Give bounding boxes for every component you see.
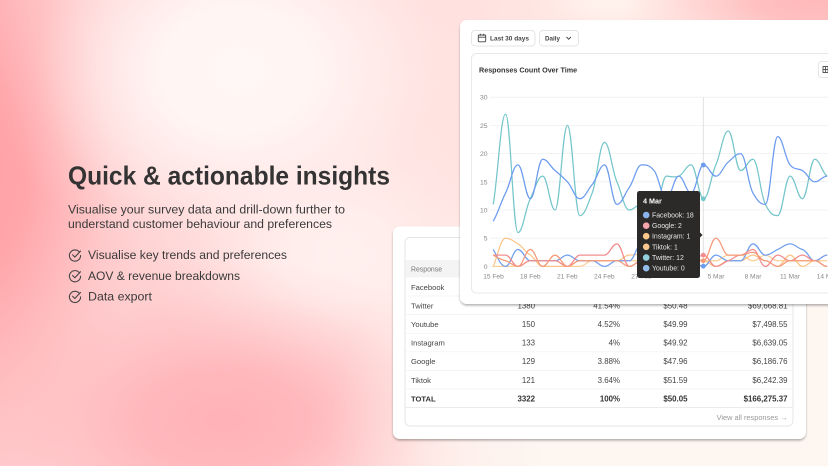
item 2: AOV & revenue breakdowns (88, 269, 240, 283)
x axis labels: 27 Feb (631, 274, 652, 280)
series: google (493, 244, 827, 266)
y axis grid and labels: 10 (480, 208, 488, 214)
series: youtube low (493, 244, 827, 266)
table rows: $50.05 (663, 394, 688, 404)
x axis labels: 18 Feb (520, 274, 541, 280)
table rows: Tiktok (411, 376, 431, 385)
table rows: $49.92 (663, 339, 688, 348)
table rows: Facebook (411, 283, 445, 292)
item 3: Data export (88, 290, 153, 304)
icon: check 3 (69, 291, 81, 303)
chart title: Responses Count Over Time (479, 65, 577, 74)
table rows: 3322 (517, 394, 536, 404)
date range button: Last 30 days (490, 36, 529, 42)
export button (818, 62, 828, 78)
series: facebook (493, 137, 827, 221)
table rows: $51.59 (663, 376, 688, 385)
table rows: 41.54% (593, 301, 620, 310)
table rows: 4.52% (598, 320, 620, 329)
panel: line chart (472, 54, 828, 293)
y axis grid and labels (480, 95, 828, 271)
view all link: View all responses → (717, 413, 788, 422)
x axis labels: 8 Mar (745, 274, 762, 280)
y axis grid and labels: 20 (480, 151, 488, 158)
x axis labels: 24 Feb (594, 274, 615, 280)
table rows: 1380 (517, 301, 536, 310)
tooltip: Instagram: 1 (652, 234, 690, 241)
table header (405, 260, 793, 278)
tooltip: Twitter: 12 (652, 255, 684, 262)
table rows: Youtube (411, 320, 439, 329)
tooltip: 4 Mar (643, 197, 662, 206)
table rows: 3.64% (598, 376, 620, 385)
x axis labels: 21 Feb (557, 274, 578, 280)
tooltip: Youtube: 0 (652, 266, 685, 273)
feature list (69, 248, 287, 304)
table rows: 133 (522, 339, 536, 348)
item 1: Visualise key trends and preferences (88, 248, 287, 262)
table rows: $6,639.05 (752, 339, 788, 348)
table rows: $50.48 (663, 301, 688, 310)
y axis grid and labels: 5 (484, 236, 488, 243)
frequency dropdown: Daily (545, 36, 561, 42)
series: orange (493, 238, 827, 266)
tooltip: Facebook: 18 (652, 212, 694, 220)
table rows: Twitter (411, 301, 434, 310)
frequency dropdown (540, 30, 578, 46)
tooltip: Google: 2 (652, 223, 682, 230)
title: Quick & actionable insights (68, 160, 390, 190)
icon: check 1 (69, 250, 81, 261)
table rows: Google (411, 357, 436, 366)
subtitle text: Visualise your survey data and drill-down further to (68, 202, 345, 216)
table rows: $6,186.76 (752, 357, 788, 366)
table rows: $166,275.37 (744, 394, 788, 404)
x axis labels: 11 Mar (780, 274, 801, 280)
panel: chart card (460, 20, 828, 304)
tooltip (637, 191, 702, 278)
table rows (411, 283, 788, 404)
table rows: TOTAL (411, 394, 436, 404)
tooltip: Tiktok: 1 (652, 244, 678, 251)
table header: Response (411, 266, 442, 274)
table rows: 129 (522, 357, 536, 366)
y axis grid and labels: 15 (480, 179, 488, 186)
x axis labels: 15 Feb (483, 274, 504, 280)
table rows: 4% (609, 339, 620, 348)
y axis grid and labels: 30 (480, 95, 488, 102)
icon: calendar (478, 34, 486, 42)
icon: check 2 (69, 271, 81, 282)
table rows: $7,498.55 (752, 320, 788, 329)
table rows: 150 (522, 320, 536, 329)
hover markers (701, 163, 706, 269)
y axis grid and labels: 0 (484, 264, 488, 271)
table rows: $47.96 (663, 357, 688, 366)
table rows: 100% (600, 394, 620, 404)
table rows: Instagram (411, 339, 445, 348)
table rows: $49.99 (663, 320, 688, 329)
table rows: $69,668.81 (748, 301, 788, 310)
subtitle text: understand customer behaviour and preferences (68, 217, 332, 231)
x axis labels (483, 274, 828, 280)
table rows: 3.88% (598, 357, 620, 366)
table rows: 121 (522, 376, 535, 385)
series: tiktok (493, 255, 827, 266)
hover guide line (702, 97, 704, 266)
subtitle text (68, 202, 345, 231)
y axis grid and labels: 25 (480, 123, 488, 130)
table rows: $6,242.39 (752, 376, 788, 385)
series: twitter (493, 114, 827, 233)
date range button (472, 30, 535, 46)
x axis labels: 5 Mar (708, 274, 725, 280)
series: instagram (493, 238, 827, 266)
line series (493, 114, 827, 266)
panel: responses table (393, 226, 806, 439)
